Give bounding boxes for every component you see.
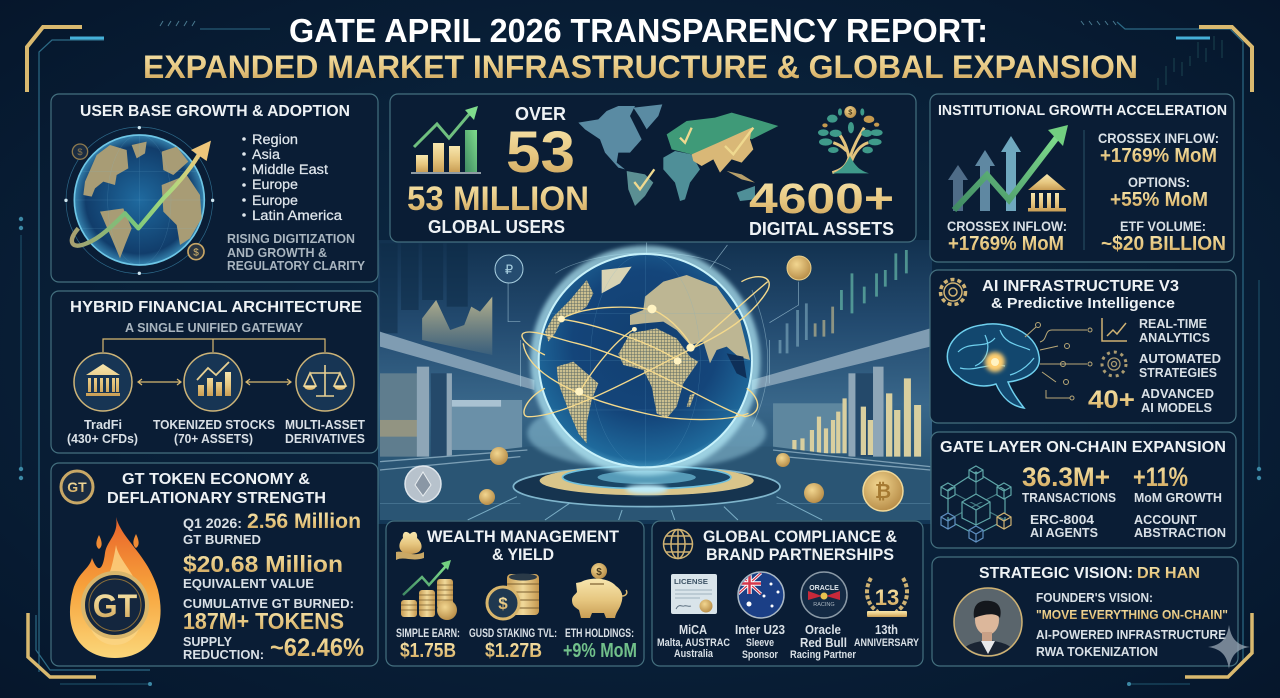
label: anniversary: 13th xyxy=(875,622,898,637)
stat: transactions: TRANSACTIONS xyxy=(1022,490,1116,505)
users stat: 53 xyxy=(506,120,575,185)
frame node dots xyxy=(19,217,1261,686)
heading: GLOBAL COMPLIANCE & xyxy=(703,528,897,546)
heading: WEALTH MANAGEMENT xyxy=(427,528,619,546)
stat: etf volume: ETF VOLUME: xyxy=(1120,219,1206,234)
label: mica xyxy=(657,622,730,660)
icon: glowing brain with connectors xyxy=(947,322,1092,408)
heading: AI INFRASTRUCTURE V3 xyxy=(982,278,1179,295)
growth drivers text: RISING DIGITIZATION xyxy=(227,232,355,246)
label: strategies: STRATEGIES xyxy=(1139,365,1217,380)
label: tokenized stocks: (70+ ASSETS) xyxy=(174,431,253,446)
central scene: trading hall with globe xyxy=(378,240,932,524)
region list xyxy=(242,132,343,223)
icon: money bag xyxy=(396,532,424,560)
node: tokenized stocks xyxy=(184,353,242,411)
stat: options: OPTIONS: xyxy=(1128,175,1190,190)
region list: Europe xyxy=(252,177,298,192)
label: mica: Malta, AUSTRAC xyxy=(657,637,730,649)
world map xyxy=(578,104,778,206)
icon: burning gt coin: GT xyxy=(93,588,138,624)
stat: simple earn: $1.75B xyxy=(400,640,456,662)
heading: INSTITUTIONAL GROWTH ACCELERATION xyxy=(938,103,1227,119)
stat: cumulative burn: 187M+ TOKENS xyxy=(183,608,344,634)
platform xyxy=(513,466,780,507)
floating coins: ₽ xyxy=(505,262,513,277)
icon: money tree: $ xyxy=(848,108,852,117)
hall beams xyxy=(380,332,534,390)
label: oracle red bull: Oracle xyxy=(805,622,841,637)
floating coins: ₿ xyxy=(875,481,891,503)
globe body xyxy=(539,254,752,467)
icon: piggy bank xyxy=(572,563,627,618)
stat: ai models: 40+ xyxy=(1088,386,1135,414)
label: oracle red bull: Red Bull xyxy=(800,635,847,650)
stat: gusd staking: GUSD STAKING TVL: xyxy=(469,628,557,640)
title xyxy=(143,12,1138,85)
heading: DEFLATIONARY STRENGTH xyxy=(107,490,326,507)
label: inter u23: Inter U23 xyxy=(735,622,785,637)
founder vision text: RWA TOKENIZATION xyxy=(1036,644,1158,659)
icon: coin stacks with arrow xyxy=(401,560,457,620)
label: tradfi xyxy=(67,417,138,446)
stat: equivalent value: EQUIVALENT VALUE xyxy=(183,576,314,591)
icon: staking coins: $ xyxy=(498,594,508,613)
stat: growth: MoM GROWTH xyxy=(1134,490,1222,505)
stat: q1 burn: 2.56 Million xyxy=(247,510,361,533)
arrow: tradfi to tokenized xyxy=(138,379,181,385)
stat: transactions xyxy=(1022,462,1116,505)
region list: Latin America xyxy=(252,208,343,223)
assets stat: DIGITAL ASSETS xyxy=(749,219,894,239)
icon: gt coin: GT xyxy=(67,479,87,495)
label: oracle red bull xyxy=(790,622,857,661)
icon: anniversary laurel: 13 xyxy=(875,585,899,610)
stat: supply reduction: REDUCTION: xyxy=(183,647,264,662)
right windows and gold bars xyxy=(773,367,921,457)
label: mica: MiCA xyxy=(679,622,708,637)
stat: gusd staking xyxy=(469,628,557,662)
title: GATE APRIL 2026 TRANSPARENCY REPORT: xyxy=(289,12,988,49)
stat: supply reduction: ~62.46% xyxy=(270,634,364,662)
big globe xyxy=(530,246,760,476)
label: anniversary: ANNIVERSARY xyxy=(854,637,920,649)
label: tokenized stocks: TOKENIZED STOCKS xyxy=(153,417,275,432)
golden orbits xyxy=(522,277,769,420)
faint market chart top right xyxy=(1158,36,1222,90)
stat: eth holdings: +9% MoM xyxy=(563,640,637,662)
globe glow xyxy=(530,246,760,476)
region list: Europe xyxy=(252,193,298,208)
node: multi-asset derivatives xyxy=(296,353,354,411)
globe continents xyxy=(545,267,750,443)
label: anniversary xyxy=(854,622,920,649)
heading xyxy=(703,528,897,564)
stat: crossex right: +1769% MoM xyxy=(1100,145,1217,167)
growth drivers text: REGULATORY CLARITY xyxy=(227,259,366,273)
stat: etf volume xyxy=(1101,219,1226,255)
panel: user base growth and adoption xyxy=(51,94,378,282)
arrow: tokenized to derivatives xyxy=(246,379,291,385)
growth drivers text: AND GROWTH & xyxy=(227,246,327,260)
heading: & YIELD xyxy=(492,546,554,564)
icon: analytics chart xyxy=(1102,318,1127,341)
heading xyxy=(107,471,326,507)
label: ai agents xyxy=(1030,512,1098,540)
floating coins xyxy=(405,255,903,511)
stat: ai models: AI MODELS xyxy=(1141,400,1212,415)
stat: q1 burn: Q1 2026: xyxy=(183,515,242,531)
heading xyxy=(982,278,1179,312)
stat: eth holdings xyxy=(563,628,637,662)
stat: simple earn: SIMPLE EARN: xyxy=(396,628,460,640)
panel: gate layer on-chain expansion xyxy=(931,432,1236,548)
region list: Region xyxy=(252,132,298,147)
heading: STRATEGIC VISION: xyxy=(979,565,1133,582)
icon: money tree xyxy=(818,106,883,173)
growth drivers text xyxy=(227,232,366,273)
label: tradfi: TradFi xyxy=(84,417,122,432)
heading: HYBRID FINANCIAL ARCHITECTURE xyxy=(70,299,362,316)
stat: simple earn xyxy=(396,628,460,662)
left data wall xyxy=(380,243,468,333)
icon: oracle red bull badge xyxy=(801,572,847,618)
title: EXPANDED MARKET INFRASTRUCTURE & GLOBAL EXPANSION xyxy=(143,49,1138,85)
icon: gt coin xyxy=(61,471,93,503)
label: oracle red bull: Racing Partner xyxy=(790,649,857,661)
icon: oracle red bull badge: RACING xyxy=(813,602,835,608)
panel: gt token economy xyxy=(51,463,378,666)
icon: growth globe xyxy=(64,126,214,275)
icon: automation gear xyxy=(1102,352,1126,376)
icon: institutional chart xyxy=(948,125,1068,212)
icon: staking coins xyxy=(487,574,539,619)
panel: global users and digital assets xyxy=(390,94,916,242)
stat: options: +55% MoM xyxy=(1110,189,1208,211)
label: analytics: REAL-TIME xyxy=(1139,316,1207,331)
label: account abstraction: ACCOUNT xyxy=(1134,512,1197,527)
icon: growth bars xyxy=(411,106,481,173)
right market chart xyxy=(780,250,906,353)
lower haze around globe xyxy=(527,397,766,470)
label: derivatives: MULTI-ASSET xyxy=(285,417,365,432)
stat: growth xyxy=(1133,462,1222,505)
icon: globe xyxy=(664,530,692,558)
founder vision text: "MOVE EVERYTHING ON-CHAIN" xyxy=(1036,607,1228,622)
icon: burning gt coin xyxy=(70,517,161,658)
label: derivatives xyxy=(285,417,365,446)
stat: supply reduction: SUPPLY xyxy=(183,634,232,649)
label: account abstraction: ABSTRACTION xyxy=(1134,525,1226,540)
heading: BRAND PARTNERSHIPS xyxy=(706,546,894,564)
icon: sparkle watermark xyxy=(1208,625,1250,669)
stat: equivalent value xyxy=(183,551,343,591)
left windows xyxy=(380,367,522,457)
stat: growth: +11% xyxy=(1133,462,1188,492)
subheading: A SINGLE UNIFIED GATEWAY xyxy=(125,320,303,335)
stat: crossex left xyxy=(947,219,1067,255)
stat: ai models xyxy=(1088,386,1214,415)
users stat xyxy=(407,104,589,237)
founder vision text xyxy=(1036,590,1228,659)
panel: ai infrastructure v3 xyxy=(930,270,1236,423)
label: analytics xyxy=(1139,316,1210,345)
icon: growth globe: $ xyxy=(193,247,199,258)
label: inter u23: Sponsor xyxy=(742,649,779,661)
label: mica: Australia xyxy=(674,648,714,660)
stat: gusd staking: $1.27B xyxy=(485,640,542,662)
stat: crossex right xyxy=(1098,131,1219,167)
icon: growth globe: $ xyxy=(77,147,83,157)
label: account abstraction xyxy=(1134,512,1226,540)
region list: Middle East xyxy=(252,162,328,177)
panel: strategic vision xyxy=(932,557,1238,666)
stat: options xyxy=(1110,175,1208,211)
icon: anniversary laurel xyxy=(867,578,907,617)
node: tradfi xyxy=(74,353,132,411)
stat: ai models: ADVANCED xyxy=(1141,386,1214,401)
heading: DR HAN xyxy=(1137,565,1200,582)
heading: GT TOKEN ECONOMY & xyxy=(122,471,310,488)
heading xyxy=(427,528,619,564)
stat: eth holdings: ETH HOLDINGS: xyxy=(565,628,634,640)
stat: cumulative burn: CUMULATIVE GT BURNED: xyxy=(183,596,354,611)
assets stat: 4600+ xyxy=(749,175,894,223)
label: tokenized stocks xyxy=(153,417,275,446)
region list: Asia xyxy=(252,147,281,162)
icon: license certificate xyxy=(671,574,717,614)
panel: global compliance and brand partnerships xyxy=(652,521,923,666)
label: derivatives: DERIVATIVES xyxy=(285,431,365,446)
panel: institutional growth acceleration xyxy=(930,94,1234,262)
heading: GATE LAYER ON-CHAIN EXPANSION xyxy=(940,439,1226,456)
label: ai agents: AI AGENTS xyxy=(1030,525,1098,540)
label: ai agents: ERC-8004 xyxy=(1030,512,1095,527)
heading: & Predictive Intelligence xyxy=(991,295,1175,312)
label: tradfi: (430+ CFDs) xyxy=(67,431,138,446)
label: strategies xyxy=(1139,351,1221,380)
stat: q1 burn: GT BURNED xyxy=(183,532,261,547)
users stat: GLOBAL USERS xyxy=(428,217,565,237)
label: inter u23: Sleeve xyxy=(746,637,774,649)
icon: block network xyxy=(941,466,1011,542)
icon: piggy bank: $ xyxy=(596,567,602,578)
stat: crossex left: CROSSEX INFLOW: xyxy=(947,219,1067,234)
icon: oracle red bull badge: ORACLE xyxy=(809,585,839,592)
icon: gear xyxy=(940,280,966,304)
stat: transactions: 36.3M+ xyxy=(1022,462,1110,492)
panel: hybrid financial architecture xyxy=(51,291,378,453)
founder vision text: FOUNDER'S VISION: xyxy=(1036,590,1153,605)
panel: wealth management and yield xyxy=(386,521,644,666)
orbit lines and coins xyxy=(522,277,769,420)
founder portrait xyxy=(954,588,1022,656)
icon: license certificate: LICENSE xyxy=(674,577,708,586)
label: strategies: AUTOMATED xyxy=(1139,351,1221,366)
stat: equivalent value: $20.68 Million xyxy=(183,551,343,577)
orbit nodes xyxy=(558,305,695,396)
stat: crossex left: +1769% MoM xyxy=(948,233,1064,255)
stat: q1 burn xyxy=(183,510,361,547)
guide lines xyxy=(508,240,799,387)
stat: etf volume: ~$20 BILLION xyxy=(1101,233,1226,255)
icon: australia flag xyxy=(738,572,784,618)
stat: crossex right: CROSSEX INFLOW: xyxy=(1098,131,1219,146)
label: inter u23 xyxy=(735,622,785,661)
globe grid lines xyxy=(539,254,752,467)
left market chart xyxy=(422,297,492,355)
founder vision text: AI-POWERED INFRASTRUCTURE xyxy=(1036,627,1226,642)
users stat: 53 MILLION xyxy=(407,180,589,218)
assets stat xyxy=(749,175,894,239)
stat: cumulative burn xyxy=(183,596,354,634)
heading: USER BASE GROWTH & ADOPTION xyxy=(80,103,350,120)
users stat: OVER xyxy=(515,104,566,124)
stat: supply reduction xyxy=(183,634,364,662)
floor xyxy=(380,447,930,520)
label: analytics: ANALYTICS xyxy=(1139,330,1210,345)
